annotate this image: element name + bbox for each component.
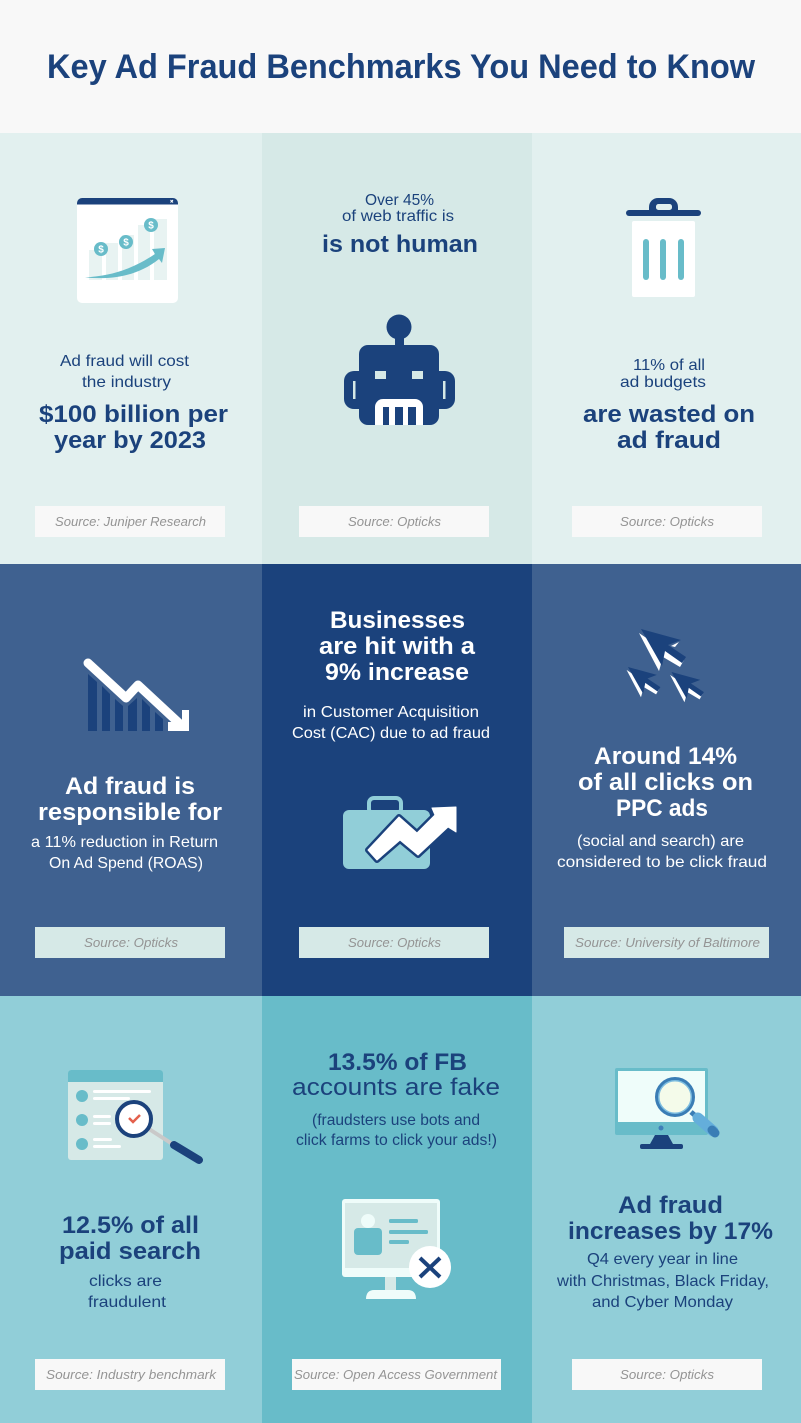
text: paid search: paid search — [59, 1238, 201, 1265]
panel: customer acquisition cost — [262, 564, 532, 996]
text: return on ad spend: Ad fraud is — [65, 773, 195, 800]
source box — [564, 927, 769, 958]
source box — [299, 927, 489, 958]
text: click fraud — [557, 743, 767, 871]
text: non-human traffic: is not human — [322, 231, 478, 258]
text: customer acquisition cost: 9% increase — [325, 659, 469, 686]
panel: seasonal increase — [532, 996, 801, 1423]
source box: Source: Juniper Research — [55, 514, 206, 529]
text: seasonal increase: with Christmas, Black Friday, — [556, 1273, 769, 1290]
source box — [35, 1359, 225, 1390]
source box: Source: Opticks — [84, 935, 179, 950]
icon: robot — [344, 314, 455, 425]
source box — [35, 506, 225, 537]
text: wasted budgets — [583, 357, 755, 454]
text: ad fraud cost: year by 2023 — [54, 427, 206, 454]
text: ad fraud cost — [39, 353, 228, 454]
icon: browser chart with dollar coins: $ — [148, 220, 154, 232]
text: seasonal increase: Ad fraud — [618, 1192, 723, 1219]
text: click fraud: of all clicks on — [578, 769, 753, 796]
source box — [292, 1359, 501, 1390]
panel: non-human traffic — [262, 133, 532, 564]
text: click fraud: (social and search) are — [577, 833, 744, 850]
source box: Source: University of Baltimore — [575, 935, 760, 950]
text: paid search: clicks are — [89, 1273, 162, 1290]
text: non-human traffic — [322, 192, 478, 258]
icon: checklist with magnifier — [68, 1070, 199, 1160]
text: ad fraud cost: the industry — [82, 374, 171, 391]
panel: click fraud — [532, 564, 801, 996]
icon: browser chart with dollar coins — [77, 198, 178, 303]
text: wasted budgets: 11% of all — [633, 357, 705, 374]
text: customer acquisition cost: Businesses — [330, 607, 465, 634]
text: fake accounts: accounts are fake — [292, 1074, 500, 1101]
text: paid search: 12.5% of all — [62, 1212, 199, 1239]
panel: paid search — [0, 996, 262, 1423]
text: seasonal increase — [556, 1192, 773, 1311]
text: seasonal increase: and Cyber Monday — [592, 1294, 733, 1311]
source box — [35, 927, 225, 958]
text: return on ad spend: On Ad Spend (ROAS) — [49, 855, 203, 872]
source box: Source: Opticks — [348, 935, 441, 950]
text: wasted budgets: ad fraud — [617, 427, 721, 454]
icon: three cursors — [627, 629, 704, 702]
icon: monitor with profile and X — [342, 1199, 451, 1299]
text: wasted budgets: are wasted on — [583, 401, 755, 428]
source box: Source: Opticks — [348, 514, 441, 529]
text: ad fraud cost: Ad fraud will cost — [60, 353, 190, 370]
source box — [299, 506, 489, 537]
text: customer acquisition cost: are hit with a — [319, 633, 476, 660]
text: wasted budgets: ad budgets — [620, 374, 706, 391]
source box: Source: Open Access Government — [294, 1367, 498, 1382]
text: customer acquisition cost: in Customer Acquisition — [303, 704, 479, 721]
text: seasonal increase: increases by 17% — [568, 1218, 773, 1245]
text: return on ad spend: responsible for — [38, 799, 222, 826]
panel: wasted budgets — [532, 133, 801, 564]
text: non-human traffic: Over 45% — [365, 192, 434, 209]
panel: return on ad spend — [0, 564, 262, 996]
text: return on ad spend: a 11% reduction in Return — [31, 834, 218, 851]
source box: Source: Opticks — [620, 1367, 715, 1382]
source box — [572, 506, 762, 537]
text: click fraud: Around 14% — [594, 743, 737, 770]
source box: Source: Industry benchmark — [46, 1367, 218, 1382]
text: click fraud: considered to be click fraud — [557, 854, 767, 871]
icon: browser chart with dollar coins: $ — [123, 238, 129, 248]
text: non-human traffic: of web traffic is — [342, 208, 454, 225]
title: Key Ad Fraud Benchmarks You Need to Know — [47, 48, 756, 86]
header band — [0, 0, 801, 133]
text: return on ad spend — [31, 773, 222, 872]
text: fake accounts: 13.5% of FB — [328, 1049, 467, 1076]
icon: monitor with magnifier — [615, 1068, 715, 1149]
panel: ad fraud cost — [0, 133, 262, 564]
panel: fake accounts — [262, 996, 532, 1423]
text: customer acquisition cost — [292, 607, 490, 742]
text: paid search — [59, 1212, 201, 1311]
text: click fraud: PPC ads — [616, 795, 708, 822]
icon: trash can — [626, 198, 701, 297]
icon: browser chart with dollar coins: $ — [98, 244, 104, 256]
text: fake accounts — [292, 1049, 500, 1149]
text: customer acquisition cost: Cost (CAC) due to ad fraud — [292, 725, 490, 742]
text: fake accounts: (fraudsters use bots and — [312, 1112, 480, 1129]
source box — [572, 1359, 762, 1390]
text: ad fraud cost: $100 billion per — [39, 401, 228, 428]
icon: briefcase with rising arrow — [343, 798, 456, 869]
icon: falling chart arrow — [88, 663, 189, 731]
source box: Source: Opticks — [620, 514, 715, 529]
text: seasonal increase: Q4 every year in line — [587, 1251, 738, 1268]
text: paid search: fraudulent — [88, 1294, 167, 1311]
text: fake accounts: click farms to click your ads!) — [296, 1132, 497, 1149]
